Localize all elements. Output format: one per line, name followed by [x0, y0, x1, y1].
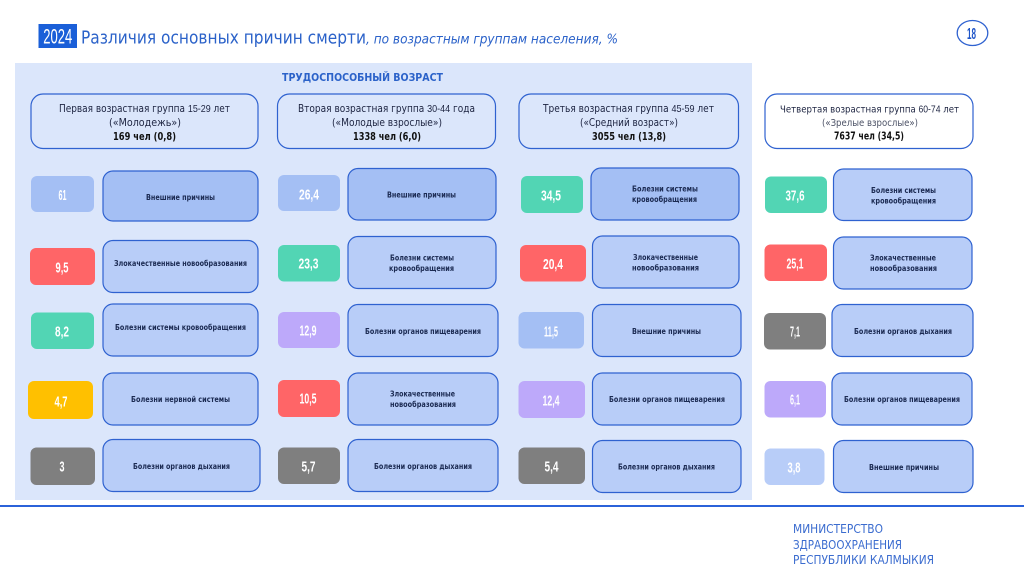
header: group 2: («Молодые взрослые»): [332, 117, 442, 129]
header: group 2: Вторая возрастная группа 30-44 года: [298, 103, 475, 115]
row: external causes 61: Внешние причины: [146, 193, 215, 202]
footer organisation name: МИНИСТЕРСТВО: [793, 522, 883, 536]
row: neoplasms 20,4: 20,4: [543, 256, 563, 273]
row: circulatory 34,5: кровообращения: [632, 195, 697, 204]
header: group 4: [765, 94, 973, 148]
row: digestive 12,9: 12,9: [300, 322, 316, 340]
row: circulatory 37,6: [765, 169, 972, 220]
page number: [957, 20, 988, 46]
row: neoplasms 9,5: Злокачественные новообразования: [114, 259, 247, 268]
row: respiratory 3: [30, 440, 260, 492]
row: circulatory 34,5: [521, 168, 739, 220]
row: circulatory 23,3: кровообращения: [389, 264, 454, 273]
row: external causes 3,8: Внешние причины: [869, 463, 939, 472]
panel heading: ТРУДОСПОСОБНЫЙ ВОЗРАСТ: [282, 71, 443, 84]
header: group 4: Четвертая возрастная группа 60-74 лет: [780, 104, 959, 116]
row: external causes 3,8: 3,8: [788, 460, 800, 476]
footer organisation name: РЕСПУБЛИКИ КАЛМЫКИЯ: [793, 553, 934, 567]
row: external causes 61: [31, 171, 258, 221]
header: group 3: Третья возрастная группа 45-59 лет: [542, 103, 714, 115]
row: respiratory 7,1: Болезни органов дыхания: [854, 327, 952, 336]
subtitle text: , по возрастным группам населения, %: [366, 32, 618, 48]
row: respiratory 5,4: 5,4: [544, 458, 559, 476]
row: neoplasms 25,1: Злокачественные: [870, 254, 936, 262]
header: group 4: 7637 чел (34,5): [834, 130, 904, 142]
row: circulatory 34,5: Болезни системы: [632, 184, 698, 194]
header: group 4: («Зрелые взрослые»): [822, 118, 918, 129]
row: respiratory 7,1: 7,1: [790, 324, 800, 340]
header: group 2: 1338 чел (6,0): [353, 131, 421, 143]
row: circulatory 34,5: 34,5: [541, 188, 561, 204]
row: nervous 4,7: [28, 373, 258, 425]
row: external causes 26,4: Внешние причины: [387, 190, 456, 200]
header: group 3: («Средний возраст»): [580, 117, 678, 129]
row: circulatory 8,2: 8,2: [55, 324, 69, 340]
row: digestive 12,4: [518, 373, 741, 425]
row: external causes 3,8: [764, 440, 973, 492]
row: respiratory 7,1: [764, 304, 973, 356]
row: nervous 4,7: 4,7: [54, 394, 68, 410]
row: digestive 12,4: Болезни органов пищеварения: [609, 395, 725, 404]
row: respiratory 5,7: [278, 440, 498, 492]
row: neoplasms 10,5: новообразования: [390, 400, 456, 409]
row: respiratory 5,7: 5,7: [302, 458, 316, 476]
header: group 1: [31, 94, 258, 148]
row: neoplasms 10,5: [278, 373, 498, 425]
row: digestive 6,1: [764, 373, 972, 425]
row: neoplasms 9,5: 9,5: [56, 260, 68, 276]
row: neoplasms 10,5: 10,5: [300, 390, 316, 408]
row: respiratory 5,7: Болезни органов дыхания: [374, 462, 472, 471]
footer organisation name: [793, 522, 934, 567]
row: circulatory 8,2: Болезни системы кровообращения: [115, 323, 246, 332]
row: neoplasms 20,4: новообразования: [632, 264, 699, 272]
footer line: [0, 505, 1024, 507]
row: circulatory 37,6: Болезни системы: [871, 186, 936, 195]
row: nervous 4,7: Болезни нервной системы: [131, 395, 230, 404]
column 4: age 60-74: [764, 94, 973, 492]
row: circulatory 23,3: [278, 236, 496, 288]
row: external causes 11,5: Внешние причины: [632, 327, 701, 336]
row: digestive 6,1: 6,1: [790, 392, 800, 408]
row: neoplasms 20,4: Злокачественные: [633, 253, 698, 262]
row: respiratory 3: 3: [60, 458, 64, 476]
background panel: working age: [15, 63, 752, 500]
row: external causes 26,4: 26,4: [299, 186, 319, 204]
row: circulatory 37,6: кровообращения: [871, 196, 936, 206]
header: group 3: 3055 чел (13,8): [592, 131, 666, 143]
column 2: age 30-44: [278, 94, 498, 492]
header: group 1: Первая возрастная группа 15-29 лет: [59, 103, 230, 115]
row: respiratory 5,4: Болезни органов дыхания: [618, 462, 715, 472]
row: digestive 12,4: 12,4: [542, 392, 560, 410]
row: neoplasms 25,1: 25,1: [786, 256, 804, 272]
row: external causes 11,5: [518, 304, 741, 356]
row: circulatory 8,2: [31, 304, 258, 356]
column 3: age 45-59: [518, 94, 741, 492]
row: circulatory 23,3: 23,3: [298, 256, 318, 272]
year badge: 2024: [43, 26, 72, 48]
row: digestive 6,1: Болезни органов пищеварения: [844, 395, 960, 404]
row: respiratory 5,4: [518, 440, 741, 492]
row: external causes 11,5: 11,5: [544, 324, 558, 340]
row: digestive 12,9: Болезни органов пищеварения: [365, 327, 481, 336]
row: respiratory 3: Болезни органов дыхания: [133, 462, 230, 471]
footer organisation name: ЗДРАВООХРАНЕНИЯ: [793, 538, 902, 552]
row: neoplasms 25,1: новообразования: [870, 264, 937, 273]
title: [38, 24, 618, 48]
row: digestive 12,9: [278, 304, 498, 356]
row: external causes 26,4: [278, 168, 496, 220]
year badge: [38, 24, 77, 48]
title text: Различия основных причин смерти: [81, 28, 366, 48]
header: group 2: [278, 94, 496, 148]
row: neoplasms 20,4: [520, 236, 739, 288]
row: neoplasms 25,1: [764, 237, 972, 289]
row: circulatory 37,6: 37,6: [786, 188, 804, 204]
row: neoplasms 9,5: [30, 240, 258, 292]
header: group 1: 169 чел (0,8): [113, 131, 176, 143]
row: circulatory 23,3: Болезни системы: [390, 254, 454, 262]
header: group 1: («Молодежь»): [109, 117, 181, 129]
column 1: age 15-29: [28, 94, 260, 492]
row: neoplasms 10,5: Злокачественные: [390, 390, 455, 398]
row: external causes 61: 61: [58, 187, 66, 204]
header: group 3: [519, 94, 738, 148]
page number: 18: [967, 26, 976, 43]
